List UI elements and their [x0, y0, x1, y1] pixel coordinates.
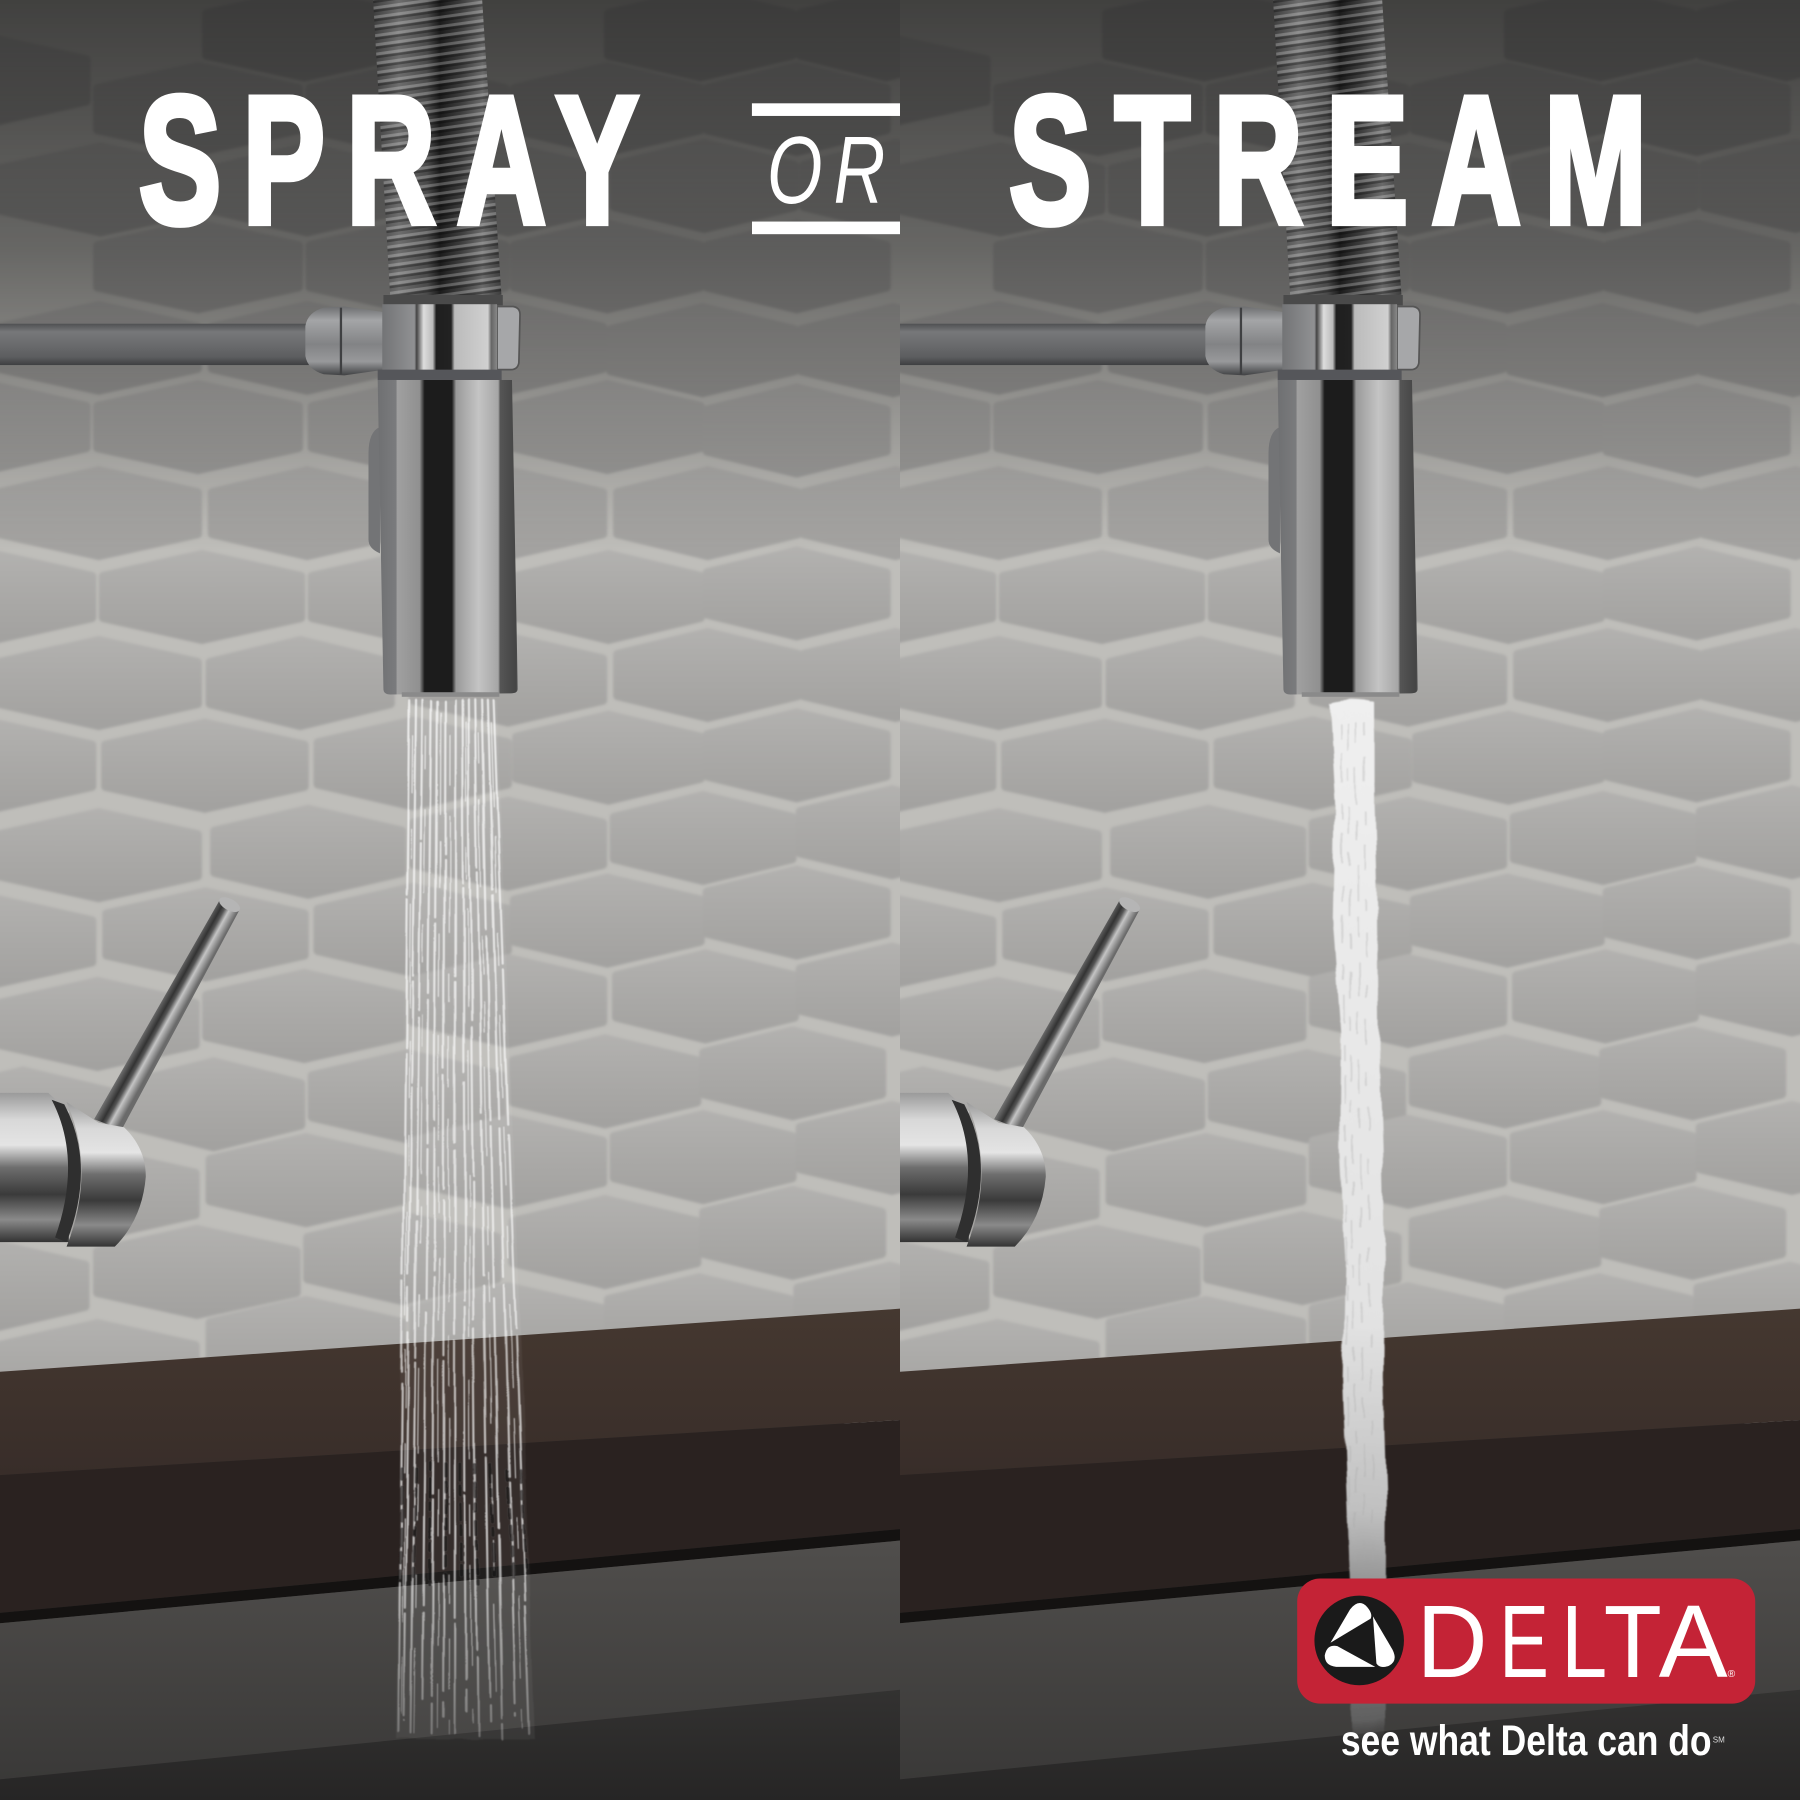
faucet: base body	[0, 1093, 69, 1242]
divider: OR with rules: OR	[767, 117, 896, 224]
counter: shadow edge	[0, 1529, 900, 1623]
counter: base shadow	[0, 1690, 900, 1800]
counter: wood front band	[0, 1420, 900, 1613]
water: spray streaks	[396, 700, 535, 1739]
heading: SPRAY: SPRAY	[139, 59, 660, 261]
logo: Delta badge	[1297, 1578, 1755, 1704]
counter: wood top	[0, 1309, 900, 1475]
wall: hexagonal tiles	[0, 0, 987, 1409]
water: solid stream	[1329, 699, 1387, 1739]
tagline: see what Delta can do	[1341, 1717, 1712, 1764]
faucet: hose	[373, 0, 502, 298]
faucet: trigger button	[368, 427, 380, 553]
logo: DELTA wordmark	[1417, 1583, 1728, 1700]
faucet: spray head body	[378, 380, 518, 695]
logo: DELTA wordmark: D	[1417, 1585, 1487, 1700]
logo: registered mark: ®	[1728, 1669, 1736, 1680]
logo: DELTA wordmark: T	[1604, 1585, 1662, 1700]
logo: Delta emblem	[1314, 1596, 1404, 1685]
wall: grout background	[0, 0, 900, 1423]
faucet: base ring	[52, 1100, 81, 1242]
counter: lower front	[0, 1541, 900, 1779]
faucet: lever tip	[217, 894, 242, 915]
logo: DELTA wordmark: L	[1561, 1583, 1607, 1699]
logo: DELTA wordmark: E	[1499, 1585, 1549, 1700]
heading: STREAM: STREAM	[1009, 59, 1670, 261]
faucet: arm coupling	[305, 307, 385, 375]
logo: DELTA wordmark: A	[1659, 1583, 1728, 1699]
faucet: collar	[378, 295, 520, 380]
tagline: SM	[1713, 1736, 1725, 1745]
panel: faucet scene (left, spray)	[0, 0, 987, 1800]
wall: top dark vignette	[0, 0, 900, 551]
faucet: lever handle	[94, 899, 240, 1130]
faucet: handle cap	[67, 1102, 146, 1247]
panel: faucet scene (right, stream)	[791, 0, 1800, 1800]
faucet: head nozzle rim	[402, 692, 499, 697]
faucet: support arm	[0, 324, 312, 365]
